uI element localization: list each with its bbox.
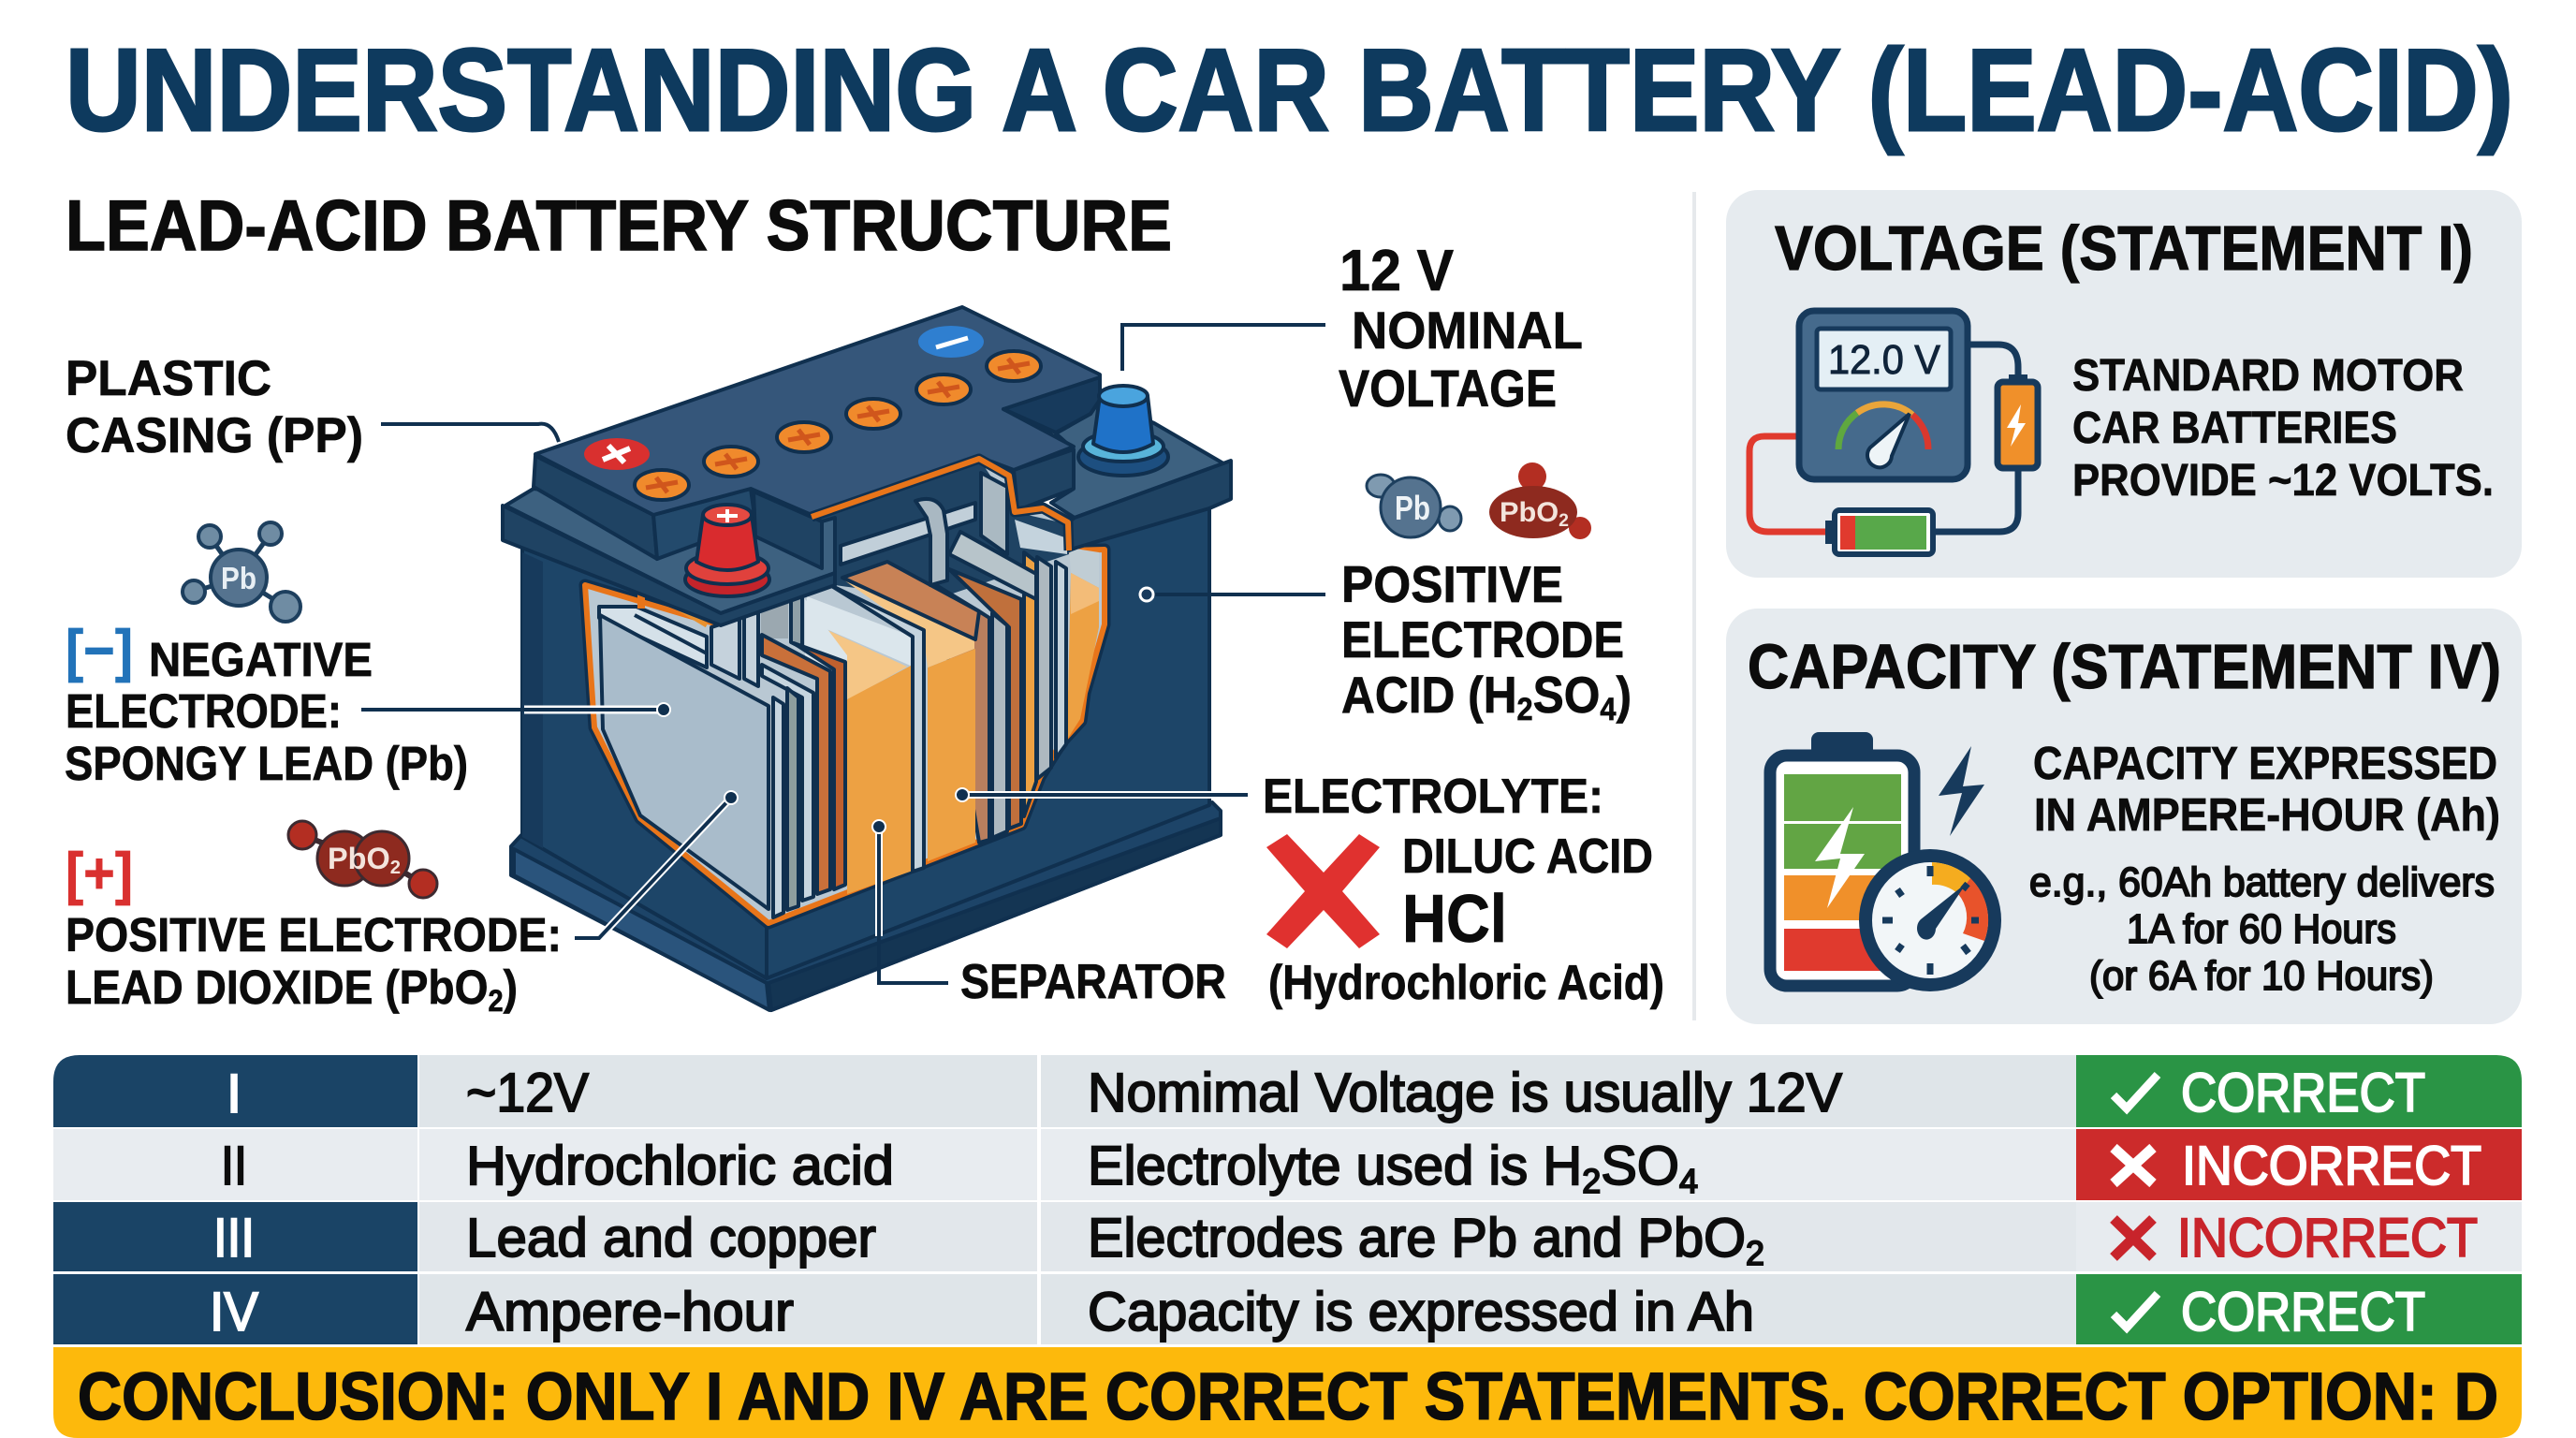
label: negative electrode: ELECTRODE:: [66, 684, 342, 738]
row III: INCORRECT: [2177, 1208, 2478, 1269]
capacity example: e.g., 60Ah battery delivers: [2029, 859, 2495, 905]
battery cutaway illustration: [503, 307, 1231, 1010]
label: HCl wrong electrolyte: DILUC ACID: [1402, 829, 1653, 884]
voltage description: STANDARD MOTOR: [2072, 351, 2464, 401]
row IV: [53, 1274, 2522, 1344]
row II: INCORRECT: [2182, 1136, 2481, 1196]
label: positive electrode: 2: [489, 984, 504, 1018]
icon: Pb molecule left: [183, 522, 300, 622]
row III: III: [213, 1208, 255, 1269]
label: positive electrode: ): [504, 961, 518, 1014]
row II: Electrolyte used is H: [1088, 1136, 1583, 1196]
row II: II: [221, 1136, 247, 1196]
label: positive electrode acid: ACID (H: [1341, 666, 1536, 724]
label: negative electrode: [65, 619, 468, 790]
capacity description: CAPACITY EXPRESSED: [2033, 739, 2497, 789]
capacity description: IN AMPERE-HOUR (Ah): [2034, 790, 2500, 841]
row IV: CORRECT: [2181, 1282, 2425, 1343]
label: 12 V nominal voltage: NOMINAL: [1352, 301, 1583, 360]
label: negative electrode: SPONGY LEAD (Pb): [65, 737, 468, 790]
row II: Hydrochloric acid: [466, 1136, 894, 1196]
statements table: [53, 1055, 2522, 1344]
voltage description: [2072, 351, 2494, 506]
connector bar: [841, 503, 975, 565]
lid orange edge: [812, 459, 1069, 550]
icon: PbO2 molecule left: [288, 821, 437, 898]
row II: 4: [1679, 1162, 1698, 1200]
divider: [1692, 192, 1696, 1020]
label: 12 V nominal voltage: VOLTAGE: [1339, 359, 1557, 418]
label: plastic casing: PLASTIC: [66, 351, 271, 406]
label: HCl wrong electrolyte: HCl: [1402, 882, 1507, 957]
icon: red cross: [1266, 834, 1380, 948]
cutaway interior: [585, 459, 1105, 923]
icon: PbO2 molecule left: PbO: [328, 842, 389, 875]
panel: capacity: [1726, 609, 2522, 1024]
leader: negative electrode: [361, 703, 670, 716]
label: positive electrode acid: 2: [1517, 692, 1533, 727]
row IV: Capacity is expressed in Ah: [1088, 1282, 1754, 1343]
label: positive electrode: LEAD DIOXIDE (PbO: [66, 961, 533, 1014]
positive terminal: [685, 505, 769, 596]
label: positive electrode acid: 4: [1600, 692, 1617, 727]
front plate: [600, 615, 768, 909]
label: positive electrode acid: POSITIVE: [1341, 555, 1563, 613]
label: positive electrode: [+]: [66, 842, 133, 906]
capacity example: [2029, 859, 2495, 999]
leader: casing dot: [1140, 588, 1325, 601]
label: positive electrode acid: [1341, 555, 1632, 727]
row IV: Ampere-hour: [466, 1282, 794, 1343]
capacity description: [2033, 739, 2500, 841]
negative terminal: [1078, 386, 1168, 476]
row II: SO: [1601, 1136, 1679, 1196]
icon: PbO2 molecule right: [1489, 462, 1591, 539]
leader: nominal voltage: [1122, 325, 1325, 371]
label: positive electrode acid: ELECTRODE: [1341, 610, 1624, 668]
panel: voltage: [1726, 190, 2522, 578]
label: HCl wrong electrolyte: [1268, 829, 1664, 1010]
label: positive electrode: POSITIVE ELECTRODE:: [66, 908, 562, 961]
leader: separator: [872, 820, 948, 983]
icon: PbO2 molecule right: 2: [1559, 511, 1569, 531]
voltage description: PROVIDE ~12 VOLTS.: [2072, 456, 2494, 506]
row II: [53, 1129, 2522, 1200]
label: positive electrode: [66, 842, 562, 1018]
leader: electrolyte: [956, 788, 1248, 801]
label: positive electrode acid: ): [1616, 666, 1632, 724]
icon: PbO2 molecule left: 2: [390, 858, 401, 878]
top post: [981, 473, 1007, 554]
label: 12 V nominal voltage: 12 V: [1339, 239, 1454, 303]
row III: Electrodes are Pb and PbO: [1088, 1208, 1749, 1269]
row III: [53, 1202, 2522, 1272]
lid polarity marks: [584, 326, 984, 470]
row IV: IV: [210, 1282, 258, 1343]
icon: Pb molecule right: [1367, 475, 1461, 537]
icon: PbO2 molecule right: PbO: [1500, 497, 1558, 528]
label: HCl wrong electrolyte: (Hydrochloric Acid): [1268, 956, 1664, 1010]
label: electrolyte: ELECTROLYTE:: [1263, 770, 1603, 824]
leader: positive electrode: [575, 791, 738, 938]
capacity example: (or 6A for 10 Hours): [2089, 953, 2434, 999]
battery foot: [511, 802, 1221, 1010]
capacity example: 1A for 60 Hours: [2127, 906, 2396, 952]
battery body: [522, 496, 1209, 978]
label: negative electrode: NEGATIVE: [149, 633, 373, 686]
row III: Lead and copper: [466, 1208, 876, 1269]
label: positive electrode acid: SO: [1533, 666, 1600, 724]
row II: 2: [1582, 1162, 1601, 1200]
icon: multimeter circuit: 12.0 V: [1828, 337, 1941, 383]
icon: Pb molecule left: Pb: [221, 561, 256, 595]
icon: battery with clock: [1770, 732, 1995, 986]
label: plastic casing: [66, 351, 559, 463]
row I: [53, 1055, 2522, 1127]
label: plastic casing: CASING (PP): [66, 408, 363, 463]
voltage heading: VOLTAGE (STATEMENT I): [1775, 213, 2473, 284]
voltage description: CAR BATTERIES: [2072, 404, 2397, 453]
label: separator: SEPARATOR: [960, 955, 1226, 1009]
row I: CORRECT: [2181, 1063, 2425, 1123]
connector clip: [915, 499, 947, 585]
row I: I: [227, 1064, 242, 1124]
icon: Pb molecule right: Pb: [1395, 489, 1430, 527]
label: negative electrode: [−]: [66, 619, 133, 683]
row I: Nomimal Voltage is usually 12V: [1088, 1063, 1842, 1123]
lid: [503, 307, 1231, 625]
row III: 2: [1746, 1234, 1764, 1272]
icon: multimeter circuit: [1749, 311, 2038, 554]
capacity heading: CAPACITY (STATEMENT IV): [1748, 632, 2501, 702]
label: 12 V nominal voltage: [1339, 239, 1583, 418]
vent caps: [635, 351, 1041, 500]
row I: ~12V: [466, 1063, 589, 1123]
section heading: battery structure: LEAD-ACID BATTERY STRUCTURE: [66, 186, 1172, 266]
